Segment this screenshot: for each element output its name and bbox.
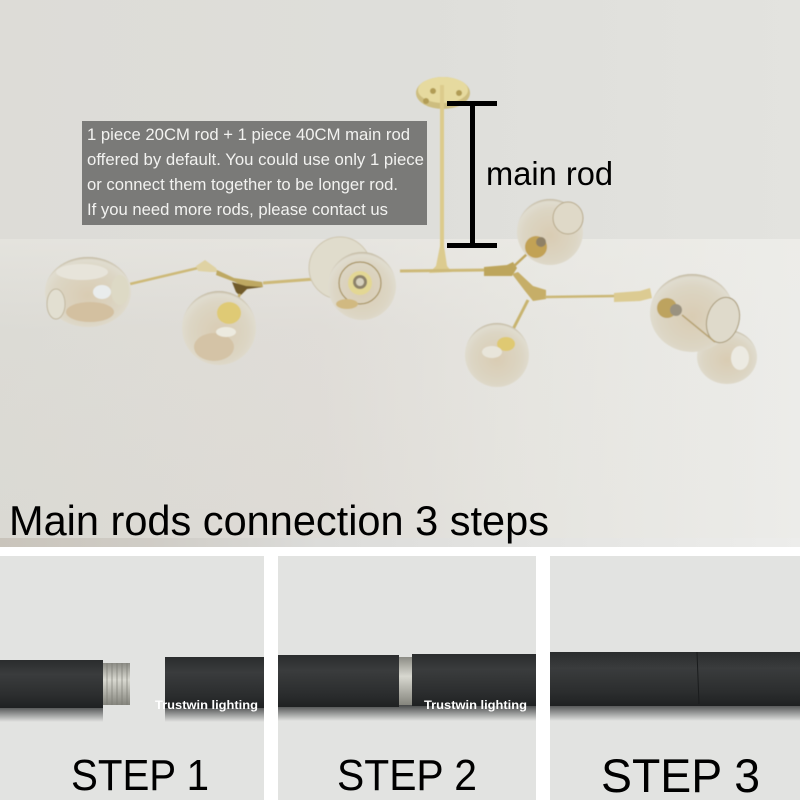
panel: step 2 xyxy=(278,556,536,800)
left rod section xyxy=(278,655,399,707)
callout: main rod explanation: or connect them together to be longer rod. xyxy=(87,176,398,194)
callout: main rod explanation: offered by default. You could use only 1 piece xyxy=(87,151,424,169)
watermark: Trustwin lighting xyxy=(424,698,527,712)
panel: step 3 xyxy=(550,556,800,800)
callout: main rod explanation xyxy=(82,121,427,225)
left rod section xyxy=(0,660,103,708)
joined rod xyxy=(550,652,800,706)
panel: step 1 xyxy=(0,556,264,800)
rod shadow xyxy=(550,704,800,721)
globe 2 xyxy=(182,291,256,365)
heading: connection steps: Main rods connection 3 steps xyxy=(9,497,549,544)
threaded connector xyxy=(103,663,130,705)
label: main rod: main rod xyxy=(486,155,613,192)
icon: glass globes xyxy=(45,199,757,387)
step label: STEP 2 xyxy=(337,751,477,800)
rod shadow xyxy=(0,706,103,722)
globe 1 xyxy=(45,257,131,327)
globe 6 xyxy=(650,274,744,352)
watermark: Trustwin lighting xyxy=(155,698,258,712)
right rod section xyxy=(165,657,264,708)
rod seam xyxy=(697,652,699,704)
icon: gold chandelier frame xyxy=(130,77,652,343)
globe 7 xyxy=(697,330,757,384)
threaded connector xyxy=(399,657,413,705)
globe 5 xyxy=(465,323,529,387)
callout: main rod explanation: 1 piece 20CM rod + 1 piece 40CM main rod xyxy=(87,126,410,144)
callout: main rod explanation: If you need more rods, please contact us xyxy=(87,201,388,219)
rod shadow xyxy=(278,705,536,721)
globe 4 xyxy=(517,199,583,265)
globe 3 front xyxy=(328,252,396,320)
dimension bracket: main rod length xyxy=(447,101,497,248)
photo: chandelier on ceiling xyxy=(0,0,800,547)
step label: STEP 1 xyxy=(71,751,209,800)
rod shadow right xyxy=(165,706,264,722)
globe 3 back xyxy=(309,237,371,299)
right rod section xyxy=(412,654,536,706)
